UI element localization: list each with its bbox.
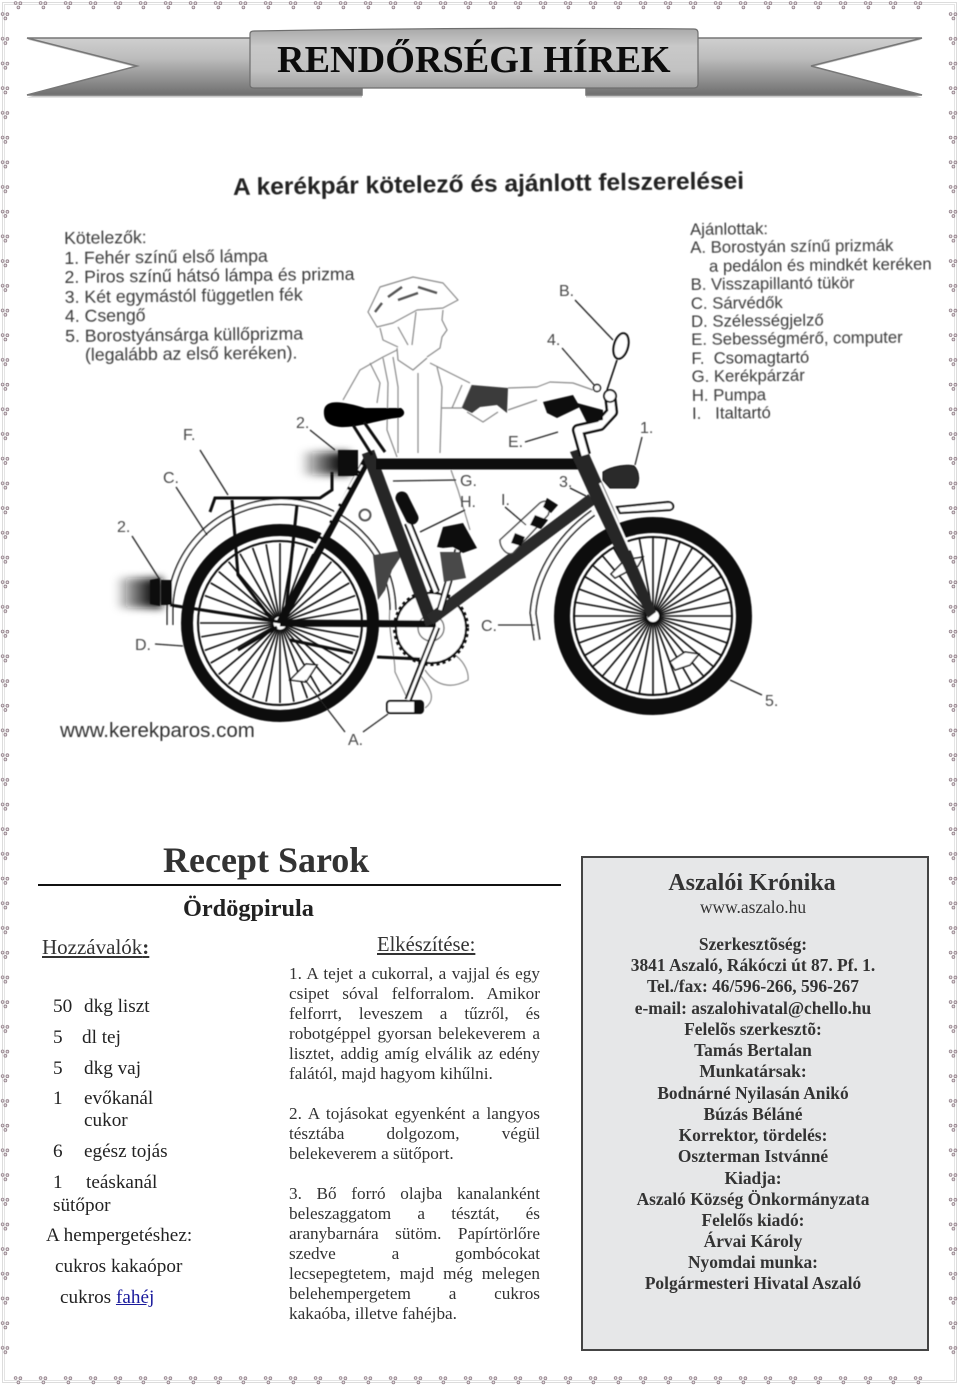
website: www.aszalo.hu (700, 897, 806, 917)
step 3: szedve a gombócokat (289, 1244, 540, 1263)
step 2: 2. A tojásokat egyenként a langyos (289, 1104, 540, 1123)
editorial details: e-mail: aszalohivatal@chello.hu (635, 998, 871, 1018)
callout labels: C. (163, 470, 179, 487)
list: mandatory equipment: 4. Csengő (65, 305, 146, 326)
editorial details: Kiadja: (724, 1168, 782, 1188)
step 2 (289, 1104, 540, 1163)
step 3: lecsepegtetem, majd még melegen (289, 1264, 540, 1283)
step 2: belekeverem a sütőport. (289, 1144, 454, 1163)
editorial details: Árvai Károly (704, 1231, 802, 1251)
editorial details: Nyomdai munka: (688, 1252, 818, 1272)
step 1: 1. A tejet a cukorral, a vajjal és egy (289, 964, 540, 983)
heading: recipe corner: Recept Sarok (163, 840, 369, 880)
list: recommended equipment: D. Szélességjelző (691, 311, 824, 331)
callout labels (117, 283, 778, 749)
rear fender (170, 502, 393, 625)
list: recommended equipment: A. Borostyán színű prizmák (690, 236, 893, 257)
ingredient list: evőkanál (84, 1088, 153, 1109)
list: recommended equipment: a pedálon és mindkét keréken (709, 254, 932, 276)
rear wheel stays (170, 605, 353, 653)
panel: ingredients (42, 935, 192, 1308)
list: recommended equipment: H. Pumpa (692, 385, 766, 405)
ingredient list: cukros fahéj (60, 1287, 154, 1308)
front lamp (603, 465, 639, 488)
step 3: beleszaggatom a tésztát, és (289, 1204, 540, 1223)
rider (343, 277, 593, 708)
callout labels: E. (508, 434, 523, 451)
list: mandatory equipment: 5. Borostyánsárga küllőprizma (65, 323, 303, 345)
rack (210, 472, 332, 620)
step 3: 3. Bő forró olajba kanalanként (289, 1184, 540, 1203)
editorial details: Szerkesztõség: (699, 934, 807, 954)
list: mandatory equipment: 2. Piros színű hátsó lámpa és prizma (64, 264, 355, 287)
editorial details: Korrektor, tördelés: (679, 1125, 827, 1145)
ingredient list: A hempergetéshez: (46, 1225, 192, 1246)
step 1: csipet sóval felforralom. Amikor (289, 984, 540, 1003)
mirror (611, 332, 631, 360)
ingredient list: 50 (53, 996, 72, 1017)
rear wheel (187, 530, 373, 716)
callout labels: F. (183, 427, 195, 444)
step 3 (289, 1184, 540, 1323)
editorial details: Oszterman Istvánné (678, 1146, 828, 1166)
leg shading (373, 550, 405, 600)
list: recommended equipment: I. Italtartó (692, 403, 771, 423)
ingredient list: 1 (53, 1172, 63, 1193)
callout labels: B. (559, 283, 574, 300)
list: mandatory equipment: 3. Két egymástól független fék (65, 284, 303, 306)
callout labels: G. (460, 473, 477, 490)
list: mandatory equipment: Kötelezők: (64, 227, 147, 248)
ingredient list: 6 (53, 1141, 63, 1162)
callout labels: C. (481, 618, 497, 635)
panel: preparation (289, 934, 540, 1323)
step 3: kakaóba, illetve fahéjba. (289, 1304, 457, 1323)
panel: imprint box (581, 856, 929, 1351)
ingredient list: teáskanál (86, 1172, 157, 1193)
step 3: aranybarnára sütöm. Papírtörlőre (289, 1224, 540, 1243)
callout labels: H. (460, 494, 476, 511)
list: recommended equipment: B. Visszapillantó tükör (691, 273, 855, 294)
list: mandatory equipment: 1. Fehér színű első lámpa (64, 245, 268, 267)
rear lights (300, 452, 350, 475)
chainring (395, 592, 467, 664)
editorial details: Tel./fax: 46/596-266, 596-267 (647, 976, 859, 996)
editorial details: Polgármesteri Hivatal Aszaló (645, 1273, 861, 1293)
callout labels: 2. (296, 415, 309, 432)
frame (280, 458, 368, 623)
glove (462, 385, 508, 413)
step 1: falától, majd hagyom kihűlni. (289, 1064, 493, 1083)
callout labels: I. (501, 492, 510, 509)
editorial details: Felelős kiadó: (702, 1210, 804, 1230)
list: mandatory equipment (64, 227, 356, 365)
list: recommended equipment (690, 219, 932, 423)
callout labels: D. (135, 637, 151, 654)
editorial details: Tamás Bertalan (694, 1040, 812, 1060)
subheading: recipe name: Ördögpirula (183, 895, 314, 922)
ingredient list: cukros kakaópor (55, 1256, 182, 1277)
step 1: robotgéppel gyorsan belekeverem a (289, 1024, 540, 1043)
callout labels: 5. (765, 693, 778, 710)
ingredient list: dl tej (82, 1027, 121, 1048)
leader lines (132, 300, 762, 732)
callout labels: 1. (640, 420, 653, 437)
ingredient list: cukor (84, 1110, 128, 1131)
ingredient list: 5 (53, 1058, 63, 1079)
illustration: bicycle with rider (59, 276, 778, 749)
editorial details: 3841 Aszaló, Rákóczi út 87. Pf. 1. (631, 955, 875, 975)
callout labels: A. (348, 732, 363, 749)
ingredients heading: Hozzávalók: (42, 935, 149, 959)
list: recommended equipment: Ajánlottak: (690, 219, 768, 239)
list: recommended equipment: C. Sárvédők (691, 293, 783, 313)
step 2: tésztába dolgozom, végül (289, 1124, 540, 1143)
saddle (324, 402, 404, 427)
ingredient list: sütőpor (53, 1195, 111, 1216)
editorial details: Búzás Béláné (703, 1104, 803, 1124)
ingredient list: dkg liszt (84, 996, 150, 1017)
callout labels: 2. (117, 519, 130, 536)
newspaper name: Aszalói Krónika (668, 870, 836, 896)
banner: ribbon header (26, 28, 922, 98)
editorial details: Bodnárné Nyilasán Anikó (657, 1083, 849, 1103)
title: RENDŐRSÉGI HÍREK (277, 39, 671, 81)
figure: bicycle diagram title: A kerékpár kötelező és ajánlott felszerelései (233, 168, 744, 201)
bottle (500, 501, 550, 554)
front fender (533, 513, 593, 640)
ingredient list: dkg vaj (84, 1058, 141, 1079)
editorial details (631, 934, 875, 1293)
ingredient list: 1 (53, 1088, 63, 1109)
ingredient list: egész tojás (84, 1141, 168, 1162)
rule under recipe heading (38, 884, 561, 886)
editorial details: Munkatársak: (699, 1061, 807, 1081)
list: recommended equipment: G. Kerékpárzár (692, 366, 805, 386)
list: recommended equipment: F. Csomagtartó (691, 348, 809, 368)
callout labels: 3. (559, 474, 572, 491)
list: mandatory equipment: (legalább az első keréken). (85, 343, 297, 365)
front wheel (562, 525, 744, 707)
website credit: www.kerekparos.com (59, 719, 255, 742)
reflectors (290, 664, 317, 682)
ingredient list: 5 (53, 1027, 63, 1048)
list: recommended equipment: E. Sebességmérő, computer (691, 328, 903, 349)
ingredient list (46, 996, 192, 1308)
preparation heading: Elkészítése: (377, 934, 475, 956)
step 1: felforrt, leveszem a tűzről, és (289, 1004, 540, 1023)
editorial details: Felelõs szerkesztõ: (684, 1019, 822, 1039)
step 1: lisztet, addig amíg elválik az edény (289, 1044, 540, 1063)
lock ring, pump and post (360, 510, 370, 520)
callout labels: 4. (547, 332, 560, 349)
chain stay and chain (280, 623, 436, 624)
handlebar (578, 395, 612, 455)
editorial details: Aszaló Község Önkormányzata (637, 1189, 869, 1209)
step 3: belehempergetem a cukros (289, 1284, 540, 1303)
step 1 (289, 964, 540, 1083)
crank arm (408, 627, 437, 700)
rear pedal (387, 701, 423, 713)
